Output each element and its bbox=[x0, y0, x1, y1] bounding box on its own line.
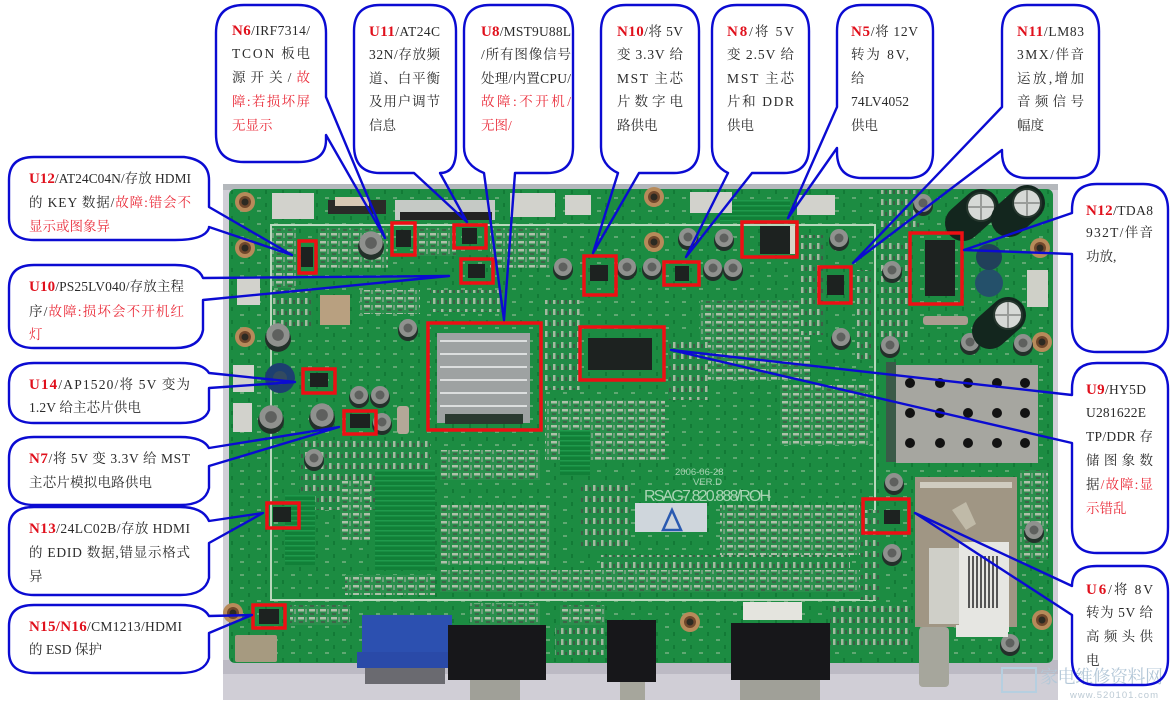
marker: N6 bbox=[392, 223, 415, 255]
black connectors bbox=[448, 620, 830, 700]
callout: N6 bbox=[216, 5, 385, 238]
callout: U9: 储图象数 bbox=[1086, 452, 1154, 468]
callout: N5: 74LV4052 bbox=[851, 94, 909, 109]
heat sink bbox=[437, 333, 530, 424]
callout: N6: TCON 板电 bbox=[232, 45, 310, 61]
marker: N7 bbox=[344, 411, 376, 434]
callout: N8: MST 主芯 bbox=[727, 70, 794, 86]
marker: N5 bbox=[742, 222, 797, 257]
callout: U9: 据/故障:显 bbox=[1086, 476, 1153, 492]
callout: N10: N10/将 5V bbox=[617, 24, 683, 40]
marker: N11 bbox=[819, 267, 851, 303]
callout: U9: U281622E bbox=[1086, 405, 1146, 420]
tuner 1 bbox=[886, 362, 1038, 463]
callout: U12: 的 KEY 数据/故障:错会不 bbox=[29, 194, 192, 210]
callout: U11: 信息 bbox=[369, 117, 396, 133]
callout: N5: N5/将 12V bbox=[851, 24, 918, 40]
pcb bbox=[229, 189, 1053, 663]
callout: N8: 片和 DDR bbox=[727, 93, 794, 109]
callout: U6: U6/将 8V bbox=[1086, 582, 1153, 598]
callout: U6: 转为 5V 给 bbox=[1086, 604, 1154, 620]
callout: U8 bbox=[464, 5, 573, 320]
callout: U12: U12/AT24C04N/存放 HDMI bbox=[29, 171, 192, 187]
marker: N12 bbox=[910, 233, 962, 304]
callout: N12: N12/TDA8 bbox=[1086, 203, 1153, 219]
tuner 2 bbox=[915, 477, 1017, 687]
callout: U10: U10/PS25LV040/存放主程 bbox=[29, 279, 184, 295]
callout: N11: N11/LM83 bbox=[1017, 24, 1084, 40]
marker: N13 bbox=[267, 503, 299, 528]
callout: N11: 幅度 bbox=[1017, 117, 1044, 133]
callout: N15/N16: 的 ESD 保护 bbox=[29, 641, 102, 657]
callout: U11 bbox=[354, 5, 467, 222]
callout: N6: N6/IRF7314/ bbox=[232, 23, 310, 39]
callout: N7: 主芯片模拟电路供电 bbox=[29, 474, 152, 490]
callout: N15/N16: N15/N16/CM1213/HDMI bbox=[29, 619, 182, 635]
callout: U11: 道、白平衡 bbox=[369, 71, 440, 86]
watermark: 家电维修资料网 bbox=[1040, 663, 1163, 689]
callout: U9: U9/HY5D bbox=[1086, 382, 1146, 398]
callout: N6: 无显示 bbox=[232, 118, 273, 133]
callout: U14 bbox=[9, 363, 295, 423]
marker: U9 bbox=[580, 327, 664, 380]
marker: N15/N16 bbox=[253, 605, 285, 628]
callout: N13 bbox=[9, 507, 263, 595]
callout: U9: TP/DDR 存 bbox=[1086, 429, 1153, 444]
callout: U6 bbox=[915, 513, 1168, 685]
callout: U11: 32N/存放频 bbox=[369, 47, 440, 62]
callout: N13: 异 bbox=[29, 569, 42, 584]
callout: U10: 灯 bbox=[29, 327, 43, 342]
photo: main board: VER.D bbox=[693, 477, 722, 488]
marker: N8 bbox=[664, 262, 699, 285]
callout: N11 bbox=[853, 5, 1099, 263]
connectors bbox=[272, 193, 314, 219]
callout: N8: 变 2.5V 给 bbox=[727, 46, 794, 62]
callout: N12: 932T/伴音 bbox=[1086, 225, 1153, 240]
callout: U6: 电 bbox=[1086, 652, 1100, 668]
callout: N11: 3MX/伴音 bbox=[1017, 47, 1084, 62]
callout: N10: MST 主芯 bbox=[617, 70, 684, 86]
callout: N10: 路供电 bbox=[617, 117, 658, 133]
callout: N5 bbox=[788, 5, 933, 218]
marker: U10 bbox=[461, 259, 493, 283]
callout: N5: 给 bbox=[851, 71, 865, 86]
callout: U6: 高频头供 bbox=[1086, 628, 1154, 644]
callout: N6: 源开关/ 故 bbox=[232, 70, 310, 85]
callout: U9: 示错乱 bbox=[1086, 501, 1126, 516]
marker: U14 bbox=[303, 369, 335, 393]
callout: N7: N7/将 5V 变 3.3V 给 MST bbox=[29, 450, 191, 467]
watermark bbox=[1002, 663, 1163, 701]
gold pads bbox=[320, 295, 350, 325]
callout: U11: 及用户调节 bbox=[369, 93, 440, 109]
hdmi bbox=[235, 635, 277, 662]
capacitors bbox=[258, 188, 1044, 656]
callout: N11: 运放,增加 bbox=[1017, 71, 1084, 86]
callout: U9 bbox=[671, 350, 1168, 553]
vga connector bbox=[357, 615, 452, 684]
callout: N10 bbox=[593, 5, 699, 253]
callout: N13: N13/24LC02B/存放 HDMI bbox=[29, 521, 190, 537]
callout: U12: 显示或图象异 bbox=[29, 219, 110, 234]
callout: N12 bbox=[964, 184, 1168, 352]
callout: N8: 供电 bbox=[727, 117, 754, 133]
callout: U8: U8/MST9U88L bbox=[481, 24, 571, 40]
callout: N15/N16 bbox=[9, 605, 252, 673]
callout: U8: /所有图像信号 bbox=[481, 47, 571, 62]
callout: N7 bbox=[9, 427, 339, 505]
callout: N5: 转为 8V, bbox=[851, 46, 909, 62]
smd regions bbox=[272, 190, 1048, 655]
callout: N12: 功放, bbox=[1086, 249, 1116, 264]
callout: N8 bbox=[686, 5, 809, 257]
callout: U10: 序/故障:损坏会不开机红 bbox=[29, 303, 184, 319]
callout: N6: 障:若损坏屏 bbox=[232, 93, 310, 109]
watermark: www.520101.com bbox=[1069, 690, 1159, 701]
callout: U8: 处理/内置CPU/ bbox=[481, 70, 571, 86]
photo: main board: RSAG7.820.888/ROH bbox=[644, 488, 771, 505]
marker: U6 bbox=[863, 499, 909, 533]
callout: N5: 供电 bbox=[851, 117, 878, 133]
pcb print: 2006-06-28 bbox=[675, 467, 724, 478]
marker: U12 bbox=[299, 241, 316, 273]
callout: U11: U11/AT24C bbox=[369, 24, 440, 40]
callout: N10: 片数字电 bbox=[617, 93, 684, 109]
callout: U12 bbox=[9, 157, 292, 255]
marker: U8 bbox=[428, 323, 541, 430]
callout: U8: 故障:不开机/ bbox=[481, 93, 571, 109]
callout: U14: U14/AP1520/将 5V 变为 bbox=[29, 376, 190, 393]
marker: U11 bbox=[454, 225, 486, 248]
callout: N8: N8/将 5V bbox=[727, 24, 794, 40]
callout: N13: 的 EDID 数据,错显示格式 bbox=[29, 544, 190, 560]
marker: N10 bbox=[584, 256, 616, 295]
callout: U10 bbox=[9, 265, 449, 348]
chips bbox=[259, 226, 955, 624]
callout: U8: 无图/ bbox=[481, 118, 512, 133]
photo: main board bbox=[223, 184, 1058, 700]
callout: N11: 音频信号 bbox=[1017, 94, 1084, 109]
callout: U14: 1.2V 给主芯片供电 bbox=[29, 399, 142, 415]
mounting holes bbox=[235, 192, 255, 212]
callout: N10: 变 3.3V 给 bbox=[617, 46, 684, 62]
